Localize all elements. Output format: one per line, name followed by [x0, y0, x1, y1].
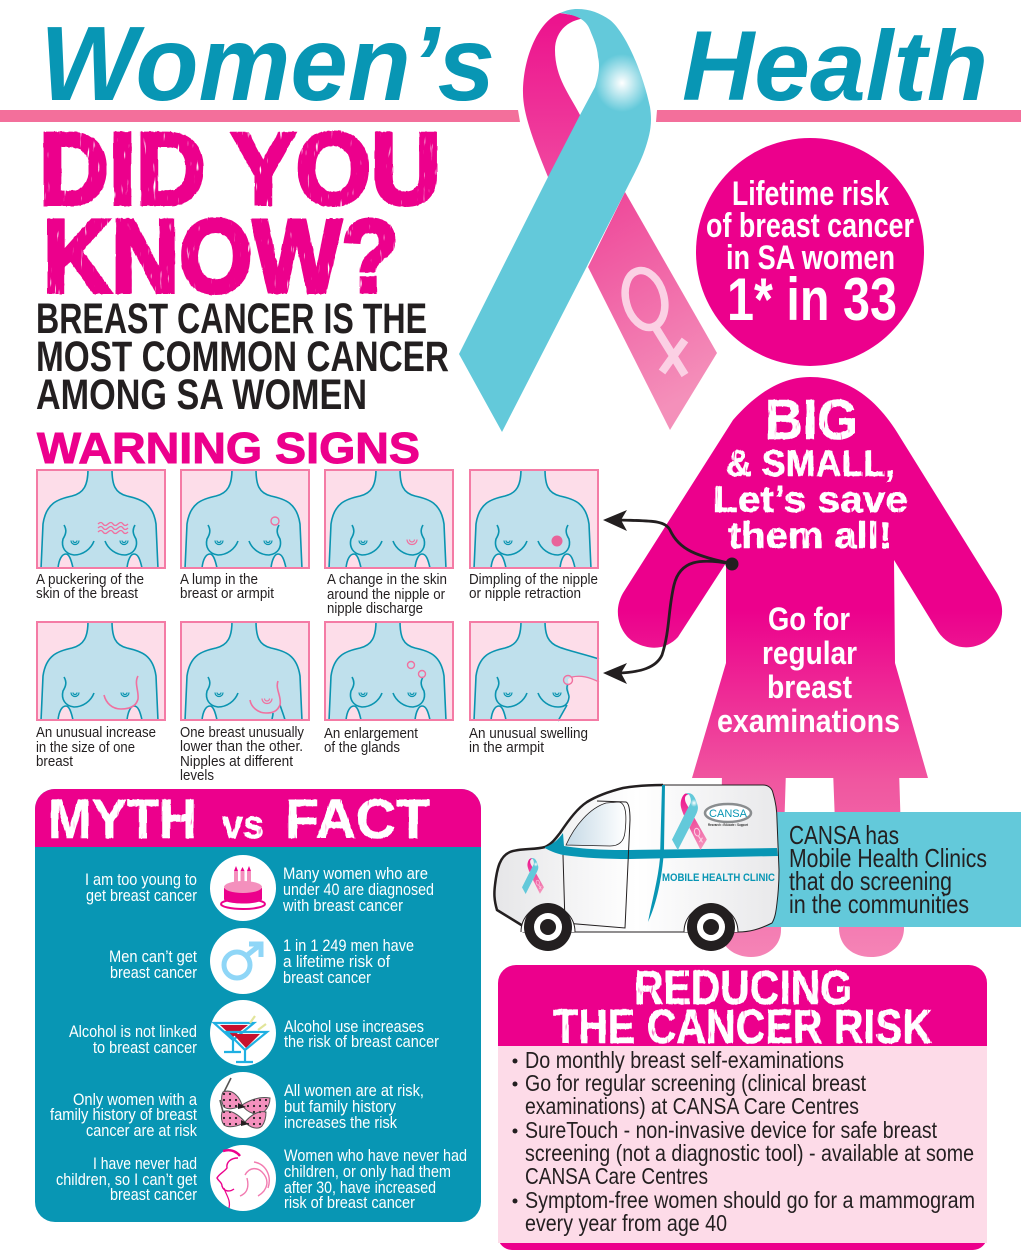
row 2: men: Men can’t get [109, 947, 197, 966]
heading: myth vs fact: vs [222, 803, 264, 847]
row 2: men: 1 in 1 249 men have [283, 936, 414, 955]
warning sign 2: lump [180, 469, 310, 602]
heading: myth vs fact: FACT [285, 787, 430, 850]
panel: CANSA mobile clinics [760, 812, 1021, 927]
warning sign 5: size increase [36, 621, 166, 770]
heading: reducing the cancer risk: REDUCING [634, 962, 852, 1015]
lifetime risk circle: 1* in 33 [727, 266, 897, 333]
warning sign 8: swelling in armpit: in the armpit [469, 739, 545, 756]
row 1: too young: get breast cancer [86, 886, 197, 905]
heading: warning signs: WARNING SIGNS [37, 424, 420, 473]
message: regular examinations: Go for [768, 601, 850, 637]
arrows from figure to warning signs [603, 510, 738, 684]
warning sign 6: lower breast: One breast unusually [180, 724, 304, 741]
title: Health: Health [682, 10, 988, 121]
warning sign 8: swelling in armpit [469, 621, 599, 756]
row 5: children: after 30, have increased [284, 1178, 436, 1197]
row 5: children: children, or only had them [284, 1162, 451, 1181]
row 2: men [109, 928, 414, 994]
van wheels [521, 903, 738, 951]
warning sign 6: lower breast: Nipples at different [180, 753, 294, 770]
row 4: family history: cancer are at risk [86, 1121, 197, 1140]
row 5: children: children, so I can’t get [56, 1170, 197, 1189]
warning sign 7: glands: of the glands [324, 739, 400, 756]
title: Women's: Women’s [40, 5, 495, 123]
warning sign 5: size increase: in the size of one [36, 739, 135, 756]
panel: reducing the cancer risk [498, 962, 987, 1250]
row 2: men: breast cancer [110, 963, 197, 982]
warning sign 4: dimpling: or nipple retraction [469, 585, 581, 602]
heading: did you know [39, 112, 441, 315]
woman figure [618, 377, 1002, 957]
message: regular examinations: examinations [717, 703, 900, 739]
heading: myth vs fact [48, 787, 430, 850]
warning sign 1: puckering: A puckering of the [36, 571, 144, 588]
lifetime risk circle: of breast cancer [706, 207, 914, 245]
slogan: big and small: them all! [728, 515, 892, 556]
warning sign 1: puckering [36, 469, 166, 602]
warning sign 6: lower breast: lower than the other. [180, 738, 303, 755]
icon: bras [220, 1078, 270, 1128]
warning sign 7: glands: An enlargement [324, 725, 419, 742]
bullet list: every year from age 40 [525, 1210, 727, 1236]
statement: most common cancer: BREAST CANCER IS THE [36, 295, 427, 343]
row 4: family history: family history of breast [50, 1105, 197, 1124]
row 5: children: breast cancer [110, 1185, 197, 1204]
lifetime risk circle: in SA women [726, 239, 895, 277]
warning sign 2: lump: A lump in the [180, 571, 258, 588]
heading: reducing the cancer risk: THE CANCER RISK [553, 1001, 932, 1054]
panel: CANSA mobile clinics: that do screening [789, 866, 952, 896]
icon: male symbol [224, 944, 261, 978]
warning sign 4: dimpling [469, 469, 599, 602]
row 4: family history: increases the risk [284, 1113, 397, 1132]
statement: most common cancer [36, 295, 449, 419]
row 3: alcohol: Alcohol is not linked [69, 1022, 197, 1041]
warning sign 1: puckering: skin of the breast [36, 585, 139, 602]
mobile clinic van [494, 785, 779, 951]
bullet list: CANSA Care Centres [525, 1163, 708, 1189]
warning sign 2: lump: breast or armpit [180, 585, 275, 602]
warning sign 3: skin change: nipple discharge [327, 600, 423, 617]
row 3: alcohol: Alcohol use increases [284, 1017, 424, 1036]
panel: myth vs fact [35, 787, 481, 1222]
warning sign 3: skin change: around the nipple or [327, 586, 445, 603]
van ribbons [522, 793, 707, 894]
heading: did you know: KNOW? [43, 199, 399, 315]
panel: CANSA mobile clinics: CANSA has [789, 820, 899, 850]
row 5: children: Women who have never had [284, 1146, 467, 1165]
warning sign 7: glands [324, 621, 454, 756]
warning sign 3: skin change: A change in the skin [327, 571, 447, 588]
row 1: too young: Many women who are [283, 864, 428, 883]
row 2: men: breast cancer [283, 968, 371, 987]
lifetime risk circle: Lifetime risk [732, 175, 889, 213]
row 1: too young: I am too young to [85, 870, 197, 889]
slogan: big and small: BIG [765, 388, 858, 452]
icon: mother and child [217, 1150, 269, 1208]
row 4: family history: but family history [284, 1097, 396, 1116]
row 5: children [56, 1145, 467, 1212]
bullet list: Go for regular screening (clinical breast [525, 1070, 867, 1096]
warning sign 4: dimpling: Dimpling of the nipple [469, 571, 598, 588]
row 1: too young: with breast cancer [282, 896, 403, 915]
warning sign 3: skin change [324, 469, 454, 617]
row 1: too young: under 40 are diagnosed [283, 880, 434, 899]
icon: birthday cake [221, 866, 265, 909]
bullet list: Do monthly breast self-examinations [525, 1047, 844, 1073]
CANSA logo: Research • Educate • Support [708, 823, 749, 827]
message: regular examinations: breast [767, 669, 852, 705]
title rule [0, 110, 1021, 122]
heading: did you know: DID YOU [39, 112, 441, 226]
warning sign 5: size increase: breast [36, 753, 74, 770]
heading: reducing the cancer risk [553, 962, 932, 1054]
row 5: children: risk of breast cancer [284, 1193, 415, 1212]
bullet list: examinations) at CANSA Care Centres [525, 1093, 859, 1119]
mobile clinic van: MOBILE HEALTH CLINIC [662, 872, 775, 884]
CANSA logo: CANSA [709, 808, 748, 820]
row 2: men: a lifetime risk of [283, 952, 390, 971]
warning sign 6: lower breast [180, 621, 310, 784]
icon: cocktails [214, 1016, 267, 1062]
slogan: big and small: Let’s save [713, 479, 908, 520]
message: regular examinations: regular [762, 635, 857, 671]
bullet list [512, 1047, 975, 1236]
row 5: children: I have never had [93, 1154, 197, 1173]
awareness ribbon [459, 9, 717, 432]
row 1: too young [85, 855, 434, 921]
row 3: alcohol [69, 1000, 439, 1066]
bullet list: SureTouch - non-invasive device for safe breast [525, 1117, 938, 1143]
slogan: big and small [713, 388, 908, 556]
message: regular examinations [717, 601, 900, 739]
slogan: big and small: & SMALL, [726, 443, 895, 484]
row 3: alcohol: to breast cancer [93, 1038, 197, 1057]
lifetime risk circle [696, 138, 924, 366]
warning sign 8: swelling in armpit: An unusual swelling [469, 725, 588, 742]
row 3: alcohol: the risk of breast cancer [284, 1032, 439, 1051]
row 4: family history [50, 1072, 424, 1140]
warning sign 5: size increase: An unusual increase [36, 724, 156, 741]
row 4: family history: Only women with a [73, 1090, 197, 1109]
panel: CANSA mobile clinics: in the communities [789, 889, 969, 919]
heading: myth vs fact: MYTH [48, 787, 197, 850]
warning sign 6: lower breast: levels [180, 767, 214, 784]
CANSA logo [705, 804, 751, 827]
statement: most common cancer: AMONG SA WOMEN [36, 371, 367, 419]
row 4: family history: All women are at risk, [284, 1081, 424, 1100]
statement: most common cancer: MOST COMMON CANCER [36, 333, 449, 381]
